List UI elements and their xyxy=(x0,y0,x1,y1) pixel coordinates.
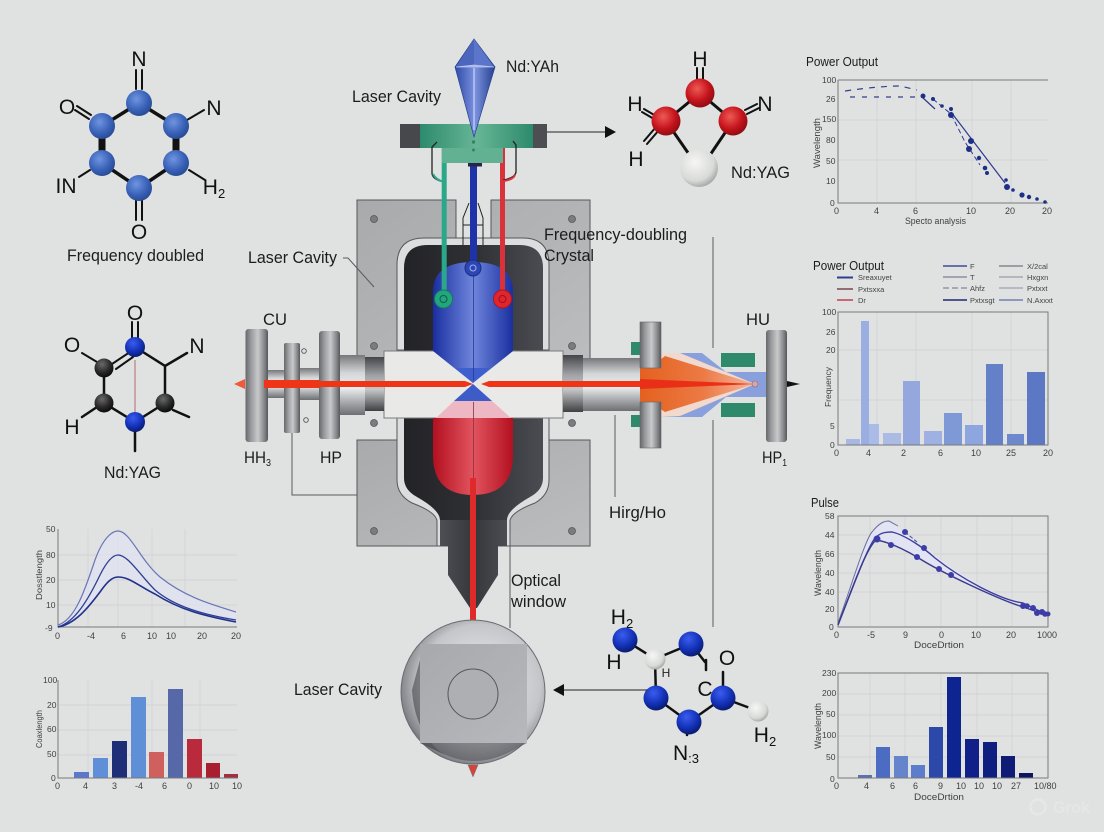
chart: left bar chart: 3 xyxy=(112,781,117,791)
labels: cavity and optics: Frequency-doubling xyxy=(544,225,687,244)
molecule: frequency doubled: H xyxy=(203,176,218,199)
chart: power output bar chart: 0 xyxy=(834,448,839,458)
molecule: frequency doubled: IN xyxy=(56,175,76,198)
chart: power output line chart: 80 xyxy=(826,135,836,145)
chart: power output line chart: 20 xyxy=(1005,206,1015,216)
molecule: frequency doubled xyxy=(56,48,225,265)
chart: pulse line chart: 0 xyxy=(939,630,944,640)
chart: left line chart: -9 xyxy=(45,623,53,633)
watermark: Grok: Grok xyxy=(1053,798,1090,817)
chart: pulse line chart: 0 xyxy=(834,630,839,640)
blue chamber xyxy=(433,262,513,401)
chart: wavelength bar chart: 6 xyxy=(890,781,895,791)
chart: power output bar chart: 25 xyxy=(1006,448,1016,458)
molecule: frequency doubled: N xyxy=(206,97,222,120)
chart: left line chart: 6 xyxy=(121,631,126,641)
molecule: frequency doubled: 2 xyxy=(218,186,225,201)
labels: cavity and optics xyxy=(244,57,787,699)
chart: power output bar chart: 5 xyxy=(830,421,835,431)
legend: Hxgxn xyxy=(1027,273,1048,282)
chart: wavelength bar chart: DoceDrtion xyxy=(914,792,964,802)
labels: cavity and optics: Laser Cavity xyxy=(248,248,337,267)
chart: pulse line chart: 44 xyxy=(825,530,835,540)
labels: cavity and optics: HP xyxy=(762,448,786,467)
labels: cavity and optics: Optical xyxy=(511,571,561,590)
label: Nd:YAG: Nd:YAG xyxy=(104,463,161,482)
labels: cavity and optics: HP xyxy=(320,448,342,467)
chart: pulse line chart: 40 xyxy=(825,568,835,578)
legend: Sreaxuyet xyxy=(858,273,893,282)
molecule: Nd:YAG left xyxy=(64,302,205,482)
arrow: molecule to sphere xyxy=(553,684,647,696)
crystal block xyxy=(384,351,563,418)
chart: power output bar chart: 4 xyxy=(866,448,871,458)
chart: pulse line chart: 0 xyxy=(829,622,834,632)
legend: Pxtxsgt xyxy=(970,296,996,305)
chart: power output line chart: 10 xyxy=(966,206,976,216)
labels: cavity and optics: window xyxy=(510,592,567,611)
legend: T xyxy=(970,273,975,282)
chart: wavelength bar chart: 10 xyxy=(956,781,966,791)
chart: left line chart: 80 xyxy=(46,550,56,560)
chart: left line chart: -4 xyxy=(87,631,95,641)
chart: power output bar chart: 0 xyxy=(830,440,835,450)
chart: wavelength bar chart xyxy=(813,668,1057,802)
labels: cavity and optics: Hirg/Ho xyxy=(609,503,666,522)
chart: power output bar chart: 6 xyxy=(938,448,943,458)
labels: cavity and optics: CU xyxy=(263,310,287,329)
legend: F xyxy=(970,262,975,271)
chart: wavelength bar chart: 10 xyxy=(992,781,1002,791)
chart: wavelength bar chart: 9 xyxy=(938,781,943,791)
chart: left line chart: 20 xyxy=(197,631,207,641)
labels: cavity and optics: Laser Cavity xyxy=(352,87,441,106)
chart: wavelength bar chart: Wavelength xyxy=(813,703,823,749)
chart: power output line chart: 20 xyxy=(1042,206,1052,216)
chart: power output line chart: 6 xyxy=(913,206,918,216)
chart: pulse line chart: DoceDrtion xyxy=(914,640,964,650)
chart: left line chart: 20 xyxy=(46,575,56,585)
chart: pulse line chart: -5 xyxy=(867,630,875,640)
molecule: Nd:YAG left: H xyxy=(64,416,80,439)
chart: power output line chart: 150 xyxy=(822,114,836,124)
labels: cavity and optics: HH xyxy=(244,448,269,467)
red chamber xyxy=(433,401,513,495)
chart: wavelength bar chart: 200 xyxy=(822,688,836,698)
chart: left line chart: 10 xyxy=(147,631,157,641)
chart: left line chart: 50 xyxy=(46,524,56,534)
molecule: top right xyxy=(627,48,790,187)
legend: Ahfz xyxy=(970,284,985,293)
chart: left bar chart: -4 xyxy=(135,781,143,791)
dark cavity xyxy=(404,245,543,546)
chart: power output bar chart: 26 xyxy=(826,327,836,337)
legend: N.Axxxt xyxy=(1027,296,1054,305)
watermark: Grok xyxy=(1030,798,1090,817)
chart: wavelength bar chart: 50 xyxy=(826,752,836,762)
chart: left bar chart: 50 xyxy=(47,749,57,759)
chart: wavelength bar chart: 27 xyxy=(1011,781,1021,791)
chart: power output line chart: 4 xyxy=(874,206,879,216)
chart: wavelength bar chart: 6 xyxy=(913,781,918,791)
molecule: frequency doubled: O xyxy=(131,221,147,244)
labels: cavity and optics: HU xyxy=(746,310,770,329)
chart: pulse line chart: 58 xyxy=(825,511,835,521)
labels: cavity and optics: Crystal xyxy=(544,246,594,265)
cavity outline xyxy=(397,238,549,546)
chart: wavelength bar chart: 10/80 xyxy=(1034,781,1057,791)
label: Frequency doubled: Frequency doubled xyxy=(67,246,204,265)
chart: left bar chart: 10 xyxy=(209,781,219,791)
label: Nd:YAG right: Nd:YAG xyxy=(731,163,790,182)
chart: power output line chart: 50 xyxy=(826,156,836,166)
labels: cavity and optics: 1 xyxy=(782,458,787,469)
chart: pulse line chart xyxy=(811,496,1057,650)
molecule: bottom: C xyxy=(697,678,713,701)
chart: power output bar chart: Frequency xyxy=(823,366,833,407)
red output beam xyxy=(470,478,476,622)
chart: pulse line chart: 20 xyxy=(1006,630,1016,640)
molecule: bottom: H xyxy=(662,666,670,680)
chart: pulse line chart: 20 xyxy=(825,604,835,614)
chart: left bar chart: 100 xyxy=(43,675,57,685)
laser apparatus xyxy=(234,39,800,777)
horizontal laser beam xyxy=(234,379,758,389)
molecule: frequency doubled: N xyxy=(131,48,147,71)
molecule: bottom xyxy=(606,606,776,766)
chart: left bar chart: 4 xyxy=(83,781,88,791)
chart: left line chart: 10 xyxy=(166,631,176,641)
molecule: bottom: H xyxy=(606,651,622,674)
chart: power output line chart: Specto analysis xyxy=(905,216,966,226)
chart: pulse line chart: 40 xyxy=(825,587,835,597)
chart: power output bar chart: 20 xyxy=(1043,448,1053,458)
chart: left bar chart: 10 xyxy=(232,781,242,791)
chart: power output line chart xyxy=(806,55,1052,226)
chart: wavelength bar chart: 0 xyxy=(830,774,835,784)
legend: X/2cal xyxy=(1027,262,1048,271)
chart: power output bar chart: 100 xyxy=(822,307,836,317)
chart: power output line chart: 26 xyxy=(826,94,836,104)
labels: cavity and optics: Laser Cavity xyxy=(294,680,382,699)
molecule: top right: H xyxy=(627,93,643,116)
legend: Pxtsxxa xyxy=(858,285,885,294)
molecule: bottom: 2 xyxy=(769,734,776,749)
chart: left line chart: 20 xyxy=(231,631,241,641)
labels: cavity and optics: 3 xyxy=(266,458,271,469)
chart: power output line chart: 0 xyxy=(830,198,835,208)
molecule: bottom: :3 xyxy=(688,751,699,766)
chart: wavelength bar chart: 230 xyxy=(822,668,836,678)
chart: power output line chart: 100 xyxy=(822,75,836,85)
chart: pulse line chart: 1000 xyxy=(1037,630,1057,640)
legend: Pxtxxt xyxy=(1027,284,1048,293)
right optics xyxy=(563,322,800,448)
leader lines xyxy=(292,237,713,628)
labels: cavity and optics: Nd:YAh xyxy=(506,57,559,76)
chart: wavelength bar chart: 4 xyxy=(864,781,869,791)
housing plates xyxy=(357,200,590,546)
chart title: Pulse xyxy=(811,496,839,510)
chart: left bar chart: 6 xyxy=(162,781,167,791)
chart: left bar chart: 0 xyxy=(187,781,192,791)
chart: left bar chart xyxy=(34,675,242,791)
molecule: frequency doubled: O xyxy=(59,96,75,119)
chart: left bar chart: Coaxlength xyxy=(34,710,44,748)
chart: left bar chart: 20 xyxy=(47,700,57,710)
focusing tip xyxy=(440,520,507,608)
legend xyxy=(837,262,1054,305)
molecule: bottom: 2 xyxy=(626,616,633,631)
chart: pulse line chart: 9 xyxy=(903,630,908,640)
chart title: Power Output xyxy=(813,259,884,273)
icon: crystal gem xyxy=(455,39,495,137)
molecule: Nd:YAG left: O xyxy=(64,334,80,357)
chart: power output line chart: 0 xyxy=(834,206,839,216)
molecule: bottom: H xyxy=(611,606,626,629)
ports and feed tubes xyxy=(434,148,512,308)
chart: power output bar chart: 10 xyxy=(971,448,981,458)
chart: left bar chart: 0 xyxy=(55,781,60,791)
left optics xyxy=(246,329,384,442)
chart: left line chart: 0 xyxy=(55,631,60,641)
chart: power output bar chart xyxy=(813,259,1054,458)
chart: pulse line chart: 10 xyxy=(971,630,981,640)
molecule: bottom: N xyxy=(673,742,688,765)
molecule: Nd:YAG left: N xyxy=(189,335,205,358)
molecule: top right: N xyxy=(757,93,773,116)
chart: left bar chart: 60 xyxy=(47,724,57,734)
sphere detector xyxy=(401,620,545,777)
molecule: bottom: H xyxy=(754,724,769,747)
chart title: Power Output xyxy=(806,55,878,69)
chart: left line chart: 10 xyxy=(46,600,56,610)
chart: left line chart: Dosstlength xyxy=(34,550,44,600)
legend: Dr xyxy=(858,296,866,305)
chart: wavelength bar chart: 0 xyxy=(834,781,839,791)
molecule: Nd:YAG left: O xyxy=(127,302,143,325)
arrow: mount to molecule xyxy=(547,126,616,138)
molecule: top right: H xyxy=(692,48,708,71)
molecule: top right: H xyxy=(628,148,644,171)
chart: power output bar chart: 20 xyxy=(826,345,836,355)
chart: wavelength bar chart: 10 xyxy=(974,781,984,791)
chart: power output line chart: 10 xyxy=(826,176,836,186)
chart: wavelength bar chart: 50 xyxy=(826,709,836,719)
chart: pulse line chart: 66 xyxy=(825,549,835,559)
chart: power output line chart: Wavelength xyxy=(812,118,822,168)
chart: power output bar chart: 2 xyxy=(901,448,906,458)
chart: left line chart xyxy=(34,524,241,641)
molecule: bottom: O xyxy=(719,647,735,670)
green mount xyxy=(400,124,547,182)
chart: left bar chart: 0 xyxy=(51,773,56,783)
chart: pulse line chart: Wavelength xyxy=(813,550,823,596)
chart: wavelength bar chart: 100 xyxy=(822,730,836,740)
